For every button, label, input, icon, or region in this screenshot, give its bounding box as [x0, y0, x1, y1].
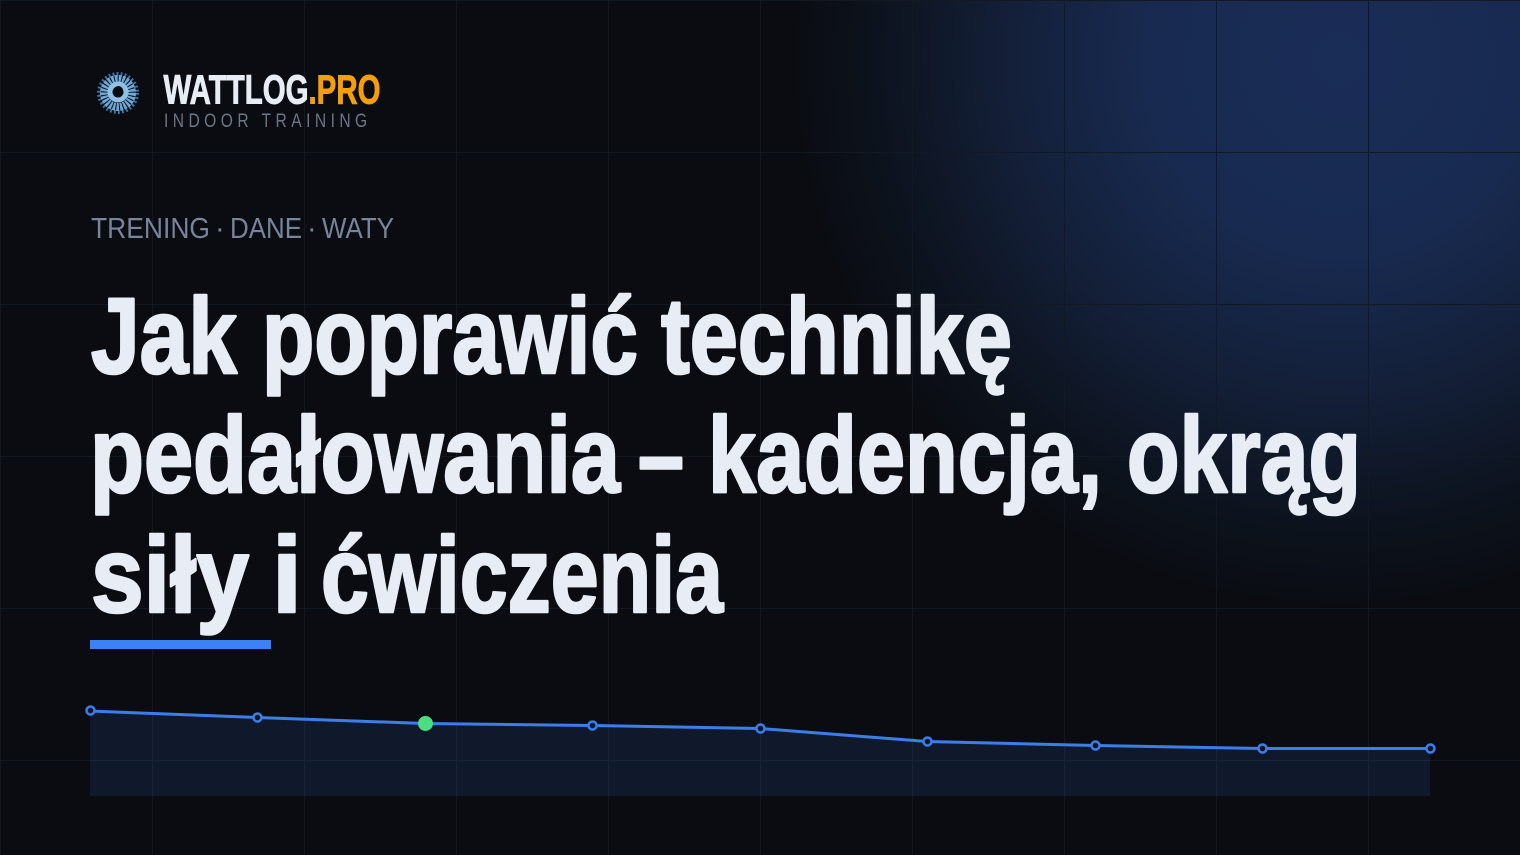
title line 1: poprawić [262, 275, 638, 396]
title line 1: technikę [661, 275, 1012, 396]
chart points [86, 706, 1434, 752]
line chart [86, 706, 1434, 796]
icon: cassette gear [99, 74, 137, 112]
title line 3: siły [91, 514, 249, 635]
chart line [90, 711, 1430, 748]
highlighted point [418, 716, 433, 731]
eyebrow: · [307, 213, 317, 245]
eyebrow [91, 213, 394, 245]
title [90, 275, 1361, 635]
title line 2: pedałowania [90, 394, 621, 515]
eyebrow: · [215, 213, 225, 245]
title line 2: okrąg [1127, 394, 1361, 515]
eyebrow: DANE [230, 213, 302, 245]
title line 1: Jak [91, 275, 238, 396]
title line 3: i [272, 514, 302, 635]
logo [99, 66, 380, 131]
title line 2: – [638, 394, 684, 515]
title line 3 [91, 514, 724, 635]
eyebrow: TRENING [91, 213, 210, 245]
title underline [90, 640, 271, 649]
wordmark: WATTLOG.PRO [164, 66, 380, 112]
title line 1 [91, 275, 1012, 396]
tagline: INDOOR TRAINING [164, 109, 367, 131]
eyebrow: WATY [322, 213, 394, 245]
title line 2 [90, 394, 1361, 515]
title line 3: ćwiczenia [321, 514, 724, 635]
title line 2: kadencja, [708, 394, 1102, 515]
chart area [90, 711, 1430, 796]
